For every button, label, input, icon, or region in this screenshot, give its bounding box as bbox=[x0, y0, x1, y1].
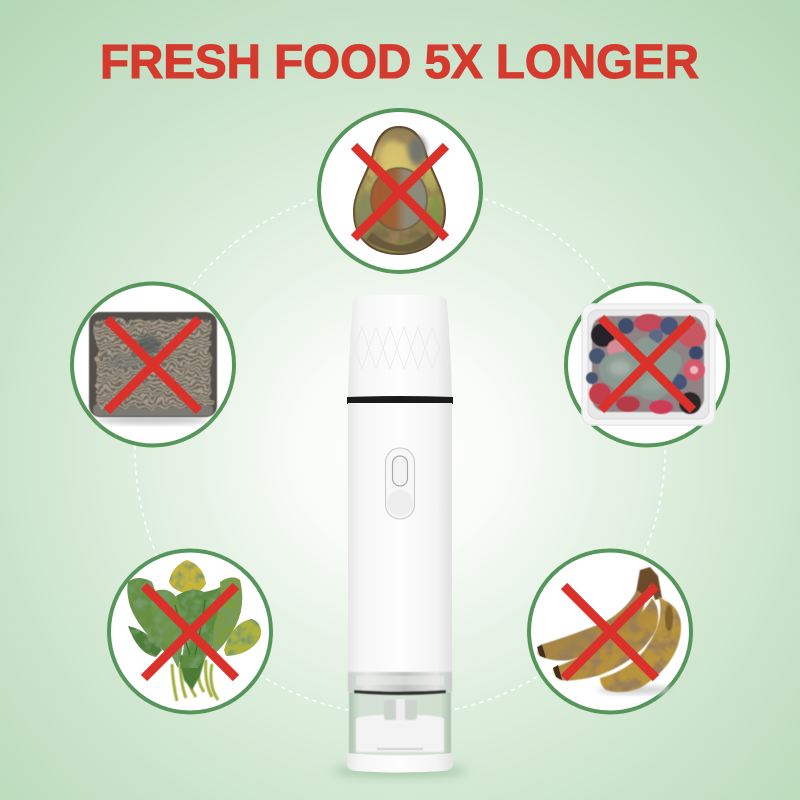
red cross bbox=[354, 146, 446, 238]
panel: spoiled berries bbox=[566, 284, 728, 446]
panel: spoiled avocado bbox=[319, 110, 481, 272]
meat tray photo bbox=[89, 312, 217, 424]
berry punnet photo bbox=[582, 304, 715, 425]
dashed connector ring bbox=[135, 185, 665, 715]
red cross bbox=[107, 319, 199, 411]
clear collar bbox=[348, 672, 452, 695]
panel: spoiled minced meat bbox=[72, 284, 234, 446]
red cross bbox=[601, 318, 693, 410]
spinach photo bbox=[127, 560, 261, 701]
mould bbox=[598, 338, 683, 400]
power button bbox=[386, 448, 414, 519]
panel: spoiled spinach bbox=[109, 550, 271, 712]
panel: spoiled bananas bbox=[529, 550, 691, 712]
avocado photo bbox=[353, 126, 446, 255]
product: vacuum sealer device bbox=[347, 294, 453, 772]
device black band bbox=[347, 396, 453, 404]
title: FRESH FOOD 5X LONGER bbox=[100, 36, 699, 89]
device handle body bbox=[348, 403, 452, 674]
device cap bbox=[348, 294, 452, 397]
red cross bbox=[564, 586, 656, 678]
red cross bbox=[144, 586, 236, 678]
cap lattice texture bbox=[349, 327, 451, 369]
device shadow bbox=[332, 765, 468, 777]
device base bbox=[347, 753, 453, 772]
bananas photo bbox=[537, 567, 681, 694]
clear chamber bbox=[349, 692, 451, 755]
